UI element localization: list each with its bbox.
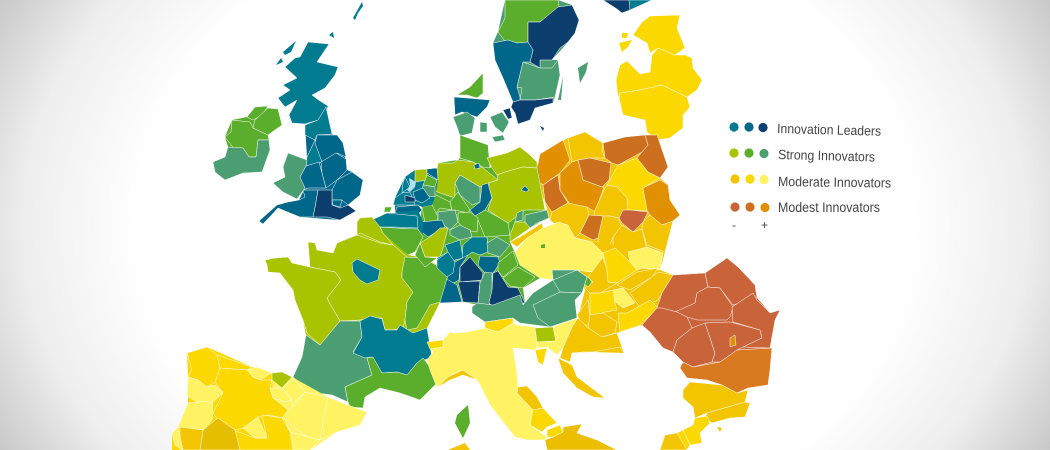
region group: Belgium and Luxembourg xyxy=(372,210,423,255)
region group: Baltic states xyxy=(616,15,702,140)
legend row: Strong Innovators xyxy=(729,147,875,165)
legend scale marks: + xyxy=(761,218,768,232)
region group: Romania xyxy=(642,258,780,367)
legend scale marks: - xyxy=(732,218,736,232)
region group: Ireland xyxy=(213,106,282,180)
legend row: Modest Innovators xyxy=(730,200,880,215)
region group: Italy xyxy=(427,318,617,450)
region group: Poland xyxy=(535,132,680,255)
region group: Spain and Portugal xyxy=(172,347,367,450)
region group: Austria xyxy=(472,270,587,327)
legend row: Innovation Leaders: Innovation Leaders xyxy=(777,121,881,139)
region group: Slovakia xyxy=(583,247,663,293)
region group: Germany xyxy=(415,135,549,307)
region group: Slovenia and Croatia xyxy=(535,318,624,398)
region group: Sweden xyxy=(493,0,588,131)
region group: Greece xyxy=(660,382,750,450)
region group: Czechia xyxy=(510,222,673,353)
region group: France xyxy=(265,217,470,438)
legend row: Strong Innovators: Strong Innovators xyxy=(778,147,875,165)
region group: Hungary xyxy=(577,268,673,337)
region group: Bulgaria xyxy=(680,348,772,393)
legend row: Moderate Innovators xyxy=(730,174,891,191)
region group: Finland xyxy=(603,0,652,13)
legend scale marks xyxy=(732,218,768,232)
legend row: Modest Innovators: Modest Innovators xyxy=(778,200,880,215)
legend row: Moderate Innovators: Moderate Innovators xyxy=(778,174,891,191)
region group: Netherlands xyxy=(384,168,438,215)
region group: Denmark xyxy=(453,73,512,142)
region group: United Kingdom xyxy=(259,2,363,224)
legend row: Innovation Leaders xyxy=(729,121,881,139)
